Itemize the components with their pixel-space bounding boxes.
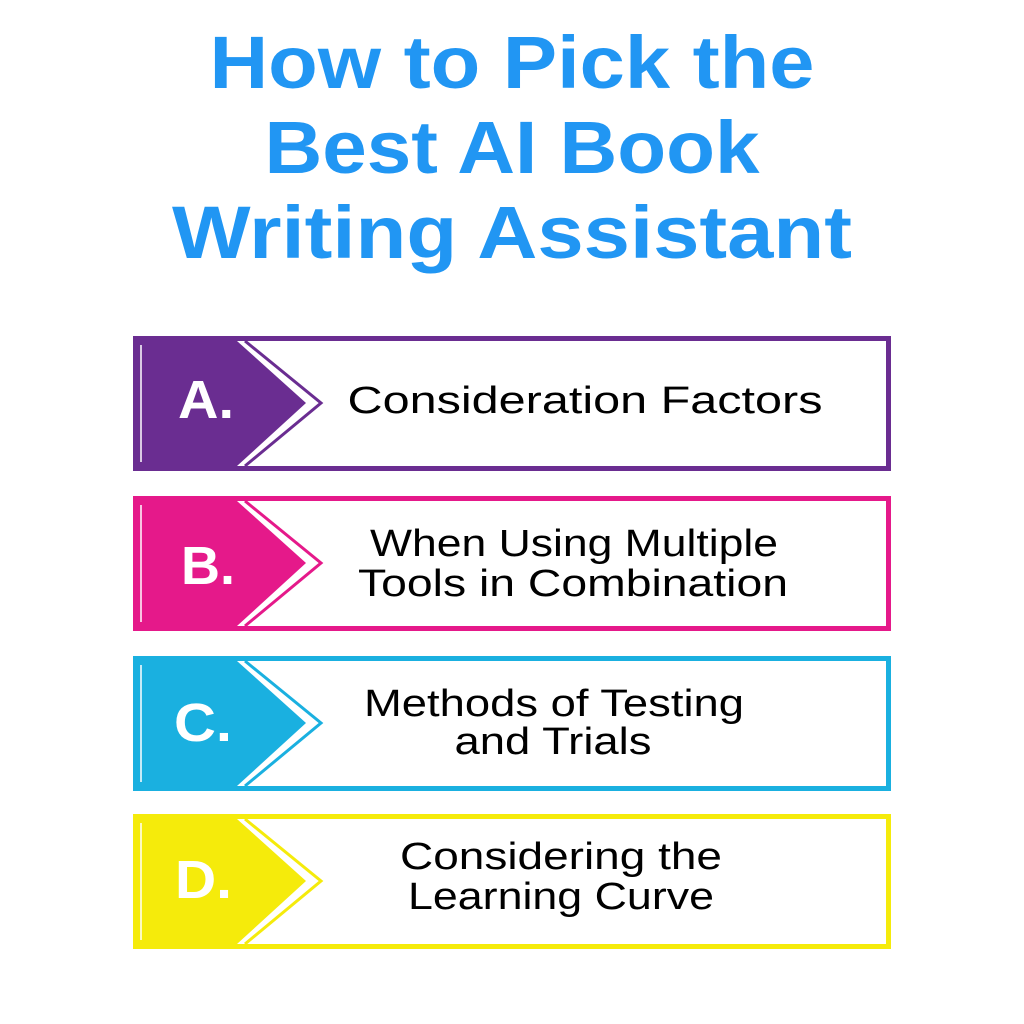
panel B: Multiple Tools: Tools in Combination <box>358 563 788 605</box>
panel C: Testing and Trials <box>136 658 888 788</box>
panel D: Learning Curve: D. <box>175 850 232 910</box>
panel A: Consideration Factors: A. <box>178 370 234 430</box>
panel C: Testing and Trials: C. <box>174 693 232 753</box>
title: Writing Assistant <box>172 191 852 274</box>
title <box>172 21 852 274</box>
panel A: Consideration Factors: Consideration Factors <box>348 380 822 422</box>
title: How to Pick the <box>210 21 814 104</box>
title: Best AI Book <box>264 106 760 189</box>
panel A: Consideration Factors <box>136 338 888 468</box>
panel C: Testing and Trials: Methods of Testing <box>364 683 744 725</box>
panel B: Multiple Tools: When Using Multiple <box>370 523 778 565</box>
panel D: Learning Curve: Learning Curve <box>408 876 714 918</box>
panel C: Testing and Trials: and Trials <box>454 721 652 763</box>
panel D: Learning Curve <box>136 816 888 946</box>
panel B: Multiple Tools: B. <box>181 536 235 596</box>
panel B: Multiple Tools <box>136 498 888 628</box>
panel D: Learning Curve: Considering the <box>400 836 722 878</box>
